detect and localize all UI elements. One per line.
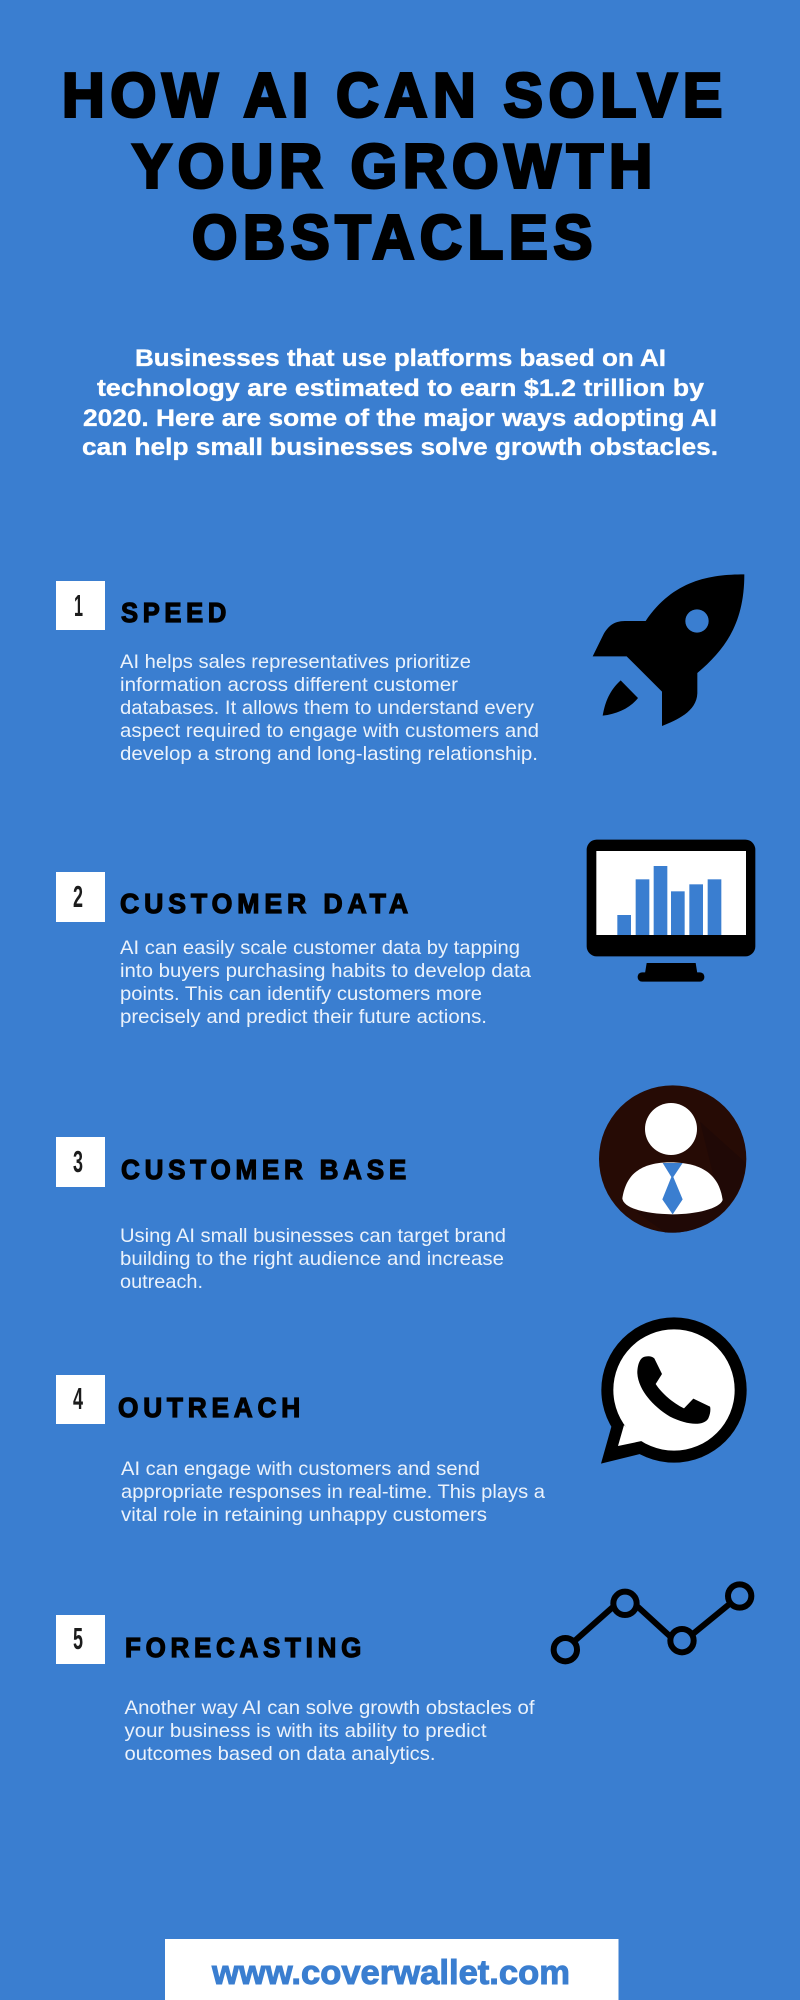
body text: outreach: vital role in retaining unhappy customers xyxy=(121,1504,487,1526)
footer banner xyxy=(165,1939,618,2000)
intro text: can help small businesses solve growth obstacles. xyxy=(82,434,718,461)
body text: customer data xyxy=(120,937,531,1028)
number badge 1 xyxy=(56,581,105,630)
heading: customer base: CUSTOMER BASE xyxy=(121,1154,411,1185)
number badge 1: 1 xyxy=(74,588,83,623)
body text: customer base xyxy=(120,1225,506,1293)
body text: forecasting: your business is with its ability to predict xyxy=(124,1720,487,1742)
body text: customer base: outreach. xyxy=(120,1271,203,1293)
panel: customer data xyxy=(56,840,755,1028)
panel: outreach xyxy=(56,1317,747,1526)
body text: speed: AI helps sales representatives prioritize xyxy=(120,651,471,673)
body text: forecasting: outcomes based on data analytics. xyxy=(124,1743,436,1765)
body text: customer data: AI can easily scale customer data by tapping xyxy=(120,937,520,959)
number badge 5: 5 xyxy=(73,1621,83,1656)
number badge 3 xyxy=(56,1137,105,1187)
body text: speed: information across different customer xyxy=(120,674,459,696)
body text: outreach xyxy=(121,1458,545,1526)
number badge 5 xyxy=(56,1615,105,1664)
icon: rocket xyxy=(593,574,744,726)
heading: customer data: CUSTOMER DATA xyxy=(120,888,413,919)
title: OBSTACLES xyxy=(192,204,598,272)
body text: speed: databases. It allows them to understand every xyxy=(120,697,534,719)
number badge 4 xyxy=(56,1375,105,1424)
icon: business person xyxy=(599,1085,746,1233)
title: YOUR GROWTH xyxy=(132,132,658,202)
number badge 2 xyxy=(56,872,105,922)
body text: speed xyxy=(120,651,539,765)
intro text: 2020. Here are some of the major ways adopting AI xyxy=(83,405,717,432)
number badge 3: 3 xyxy=(73,1144,83,1179)
body text: customer base: Using AI small businesses can target brand xyxy=(120,1225,506,1247)
title xyxy=(62,62,728,272)
body text: speed: develop a strong and long-lasting relationship. xyxy=(120,743,538,765)
intro text xyxy=(82,345,718,461)
panel: forecasting xyxy=(56,1584,751,1765)
body text: outreach: AI can engage with customers and send xyxy=(121,1458,480,1480)
intro text: Businesses that use platforms based on AI xyxy=(135,345,666,372)
number badge 2: 2 xyxy=(73,879,83,914)
title: HOW AI CAN SOLVE xyxy=(62,62,728,130)
heading: forecasting: FORECASTING xyxy=(125,1632,366,1663)
body text: speed: aspect required to engage with customers and xyxy=(120,720,539,742)
body text: customer base: building to the right audience and increase xyxy=(120,1248,504,1270)
body text: forecasting xyxy=(124,1697,535,1765)
body text: forecasting: Another way AI can solve growth obstacles of xyxy=(124,1697,535,1719)
number badge 4: 4 xyxy=(73,1381,83,1416)
body text: customer data: into buyers purchasing habits to develop data xyxy=(120,960,531,982)
heading: outreach: OUTREACH xyxy=(118,1392,305,1423)
panel: speed xyxy=(56,574,744,765)
body text: outreach: appropriate responses in real-time. This plays a xyxy=(121,1481,545,1503)
body text: customer data: precisely and predict their future actions. xyxy=(120,1006,487,1028)
icon: monitor with bar chart xyxy=(587,840,755,982)
footer banner: www.coverwallet.com xyxy=(211,1954,570,1992)
intro text: technology are estimated to earn $1.2 trillion by xyxy=(97,375,704,402)
body text: customer data: points. This can identify customers more xyxy=(120,983,482,1005)
icon: line chart xyxy=(554,1584,751,1661)
heading: speed: SPEED xyxy=(121,597,231,628)
panel: customer base xyxy=(56,1085,746,1293)
icon: chat bubble with phone xyxy=(601,1317,747,1464)
